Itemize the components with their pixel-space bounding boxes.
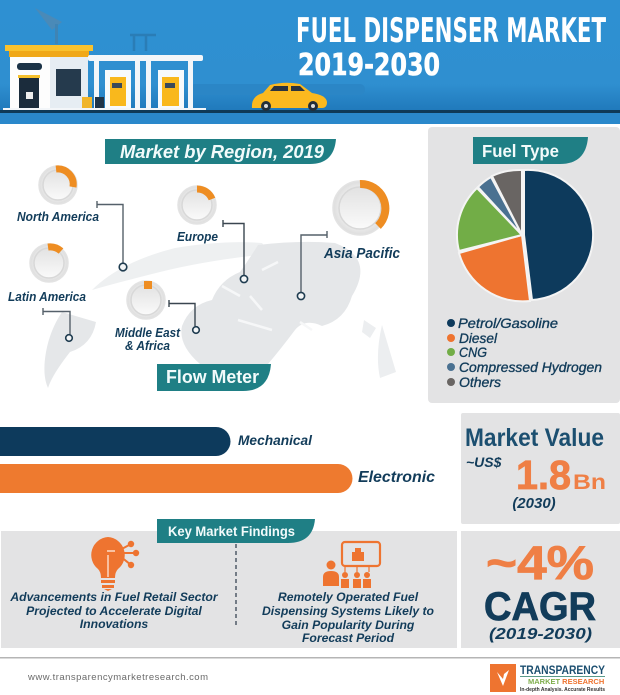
banner: key market findings: Key Market Findings	[168, 524, 295, 539]
panel: market value: Bn	[573, 471, 606, 494]
title: 2019-2030	[298, 48, 440, 83]
banner: key market findings	[157, 519, 315, 543]
panel: market value	[461, 413, 620, 524]
panel: market value: Market Value	[465, 424, 604, 452]
label: Asia Pacific: Asia Pacific	[323, 245, 401, 262]
text: finding 1: Advancements in Fuel Retail Sector	[9, 590, 219, 604]
text: finding 1: Innovations	[80, 617, 148, 631]
world map	[44, 242, 396, 388]
panel: CAGR: (2019-2030)	[489, 626, 592, 643]
icon: yellow car	[252, 83, 327, 111]
panel: CAGR: ~4%	[486, 536, 594, 589]
donut: Middle East & Africa	[127, 281, 165, 319]
label: Middle East & Africa: Middle East	[115, 325, 181, 340]
donut: Latin America	[30, 244, 68, 282]
legend: fuel types	[447, 315, 602, 390]
text: finding 2	[262, 590, 435, 645]
bar: electronic: Electronic	[358, 469, 435, 486]
footer rule	[0, 657, 620, 658]
label: Latin America: Latin America	[8, 289, 86, 304]
banner: flow meter: Flow Meter	[166, 367, 259, 387]
legend: fuel types: Others	[459, 374, 501, 390]
pie chart	[457, 170, 593, 301]
bar: electronic	[0, 464, 435, 493]
connector: Middle East & Africa	[169, 300, 199, 333]
connector: Europe	[223, 220, 248, 283]
logo: Transparency Market Research: In-depth Analysis. Accurate Results	[520, 687, 605, 693]
panel: key market findings	[1, 519, 457, 648]
text: finding 2: Dispensing Systems Likely to	[262, 604, 435, 618]
panel: market value: 1.8	[516, 452, 571, 498]
banner: fuel type	[473, 137, 588, 164]
text: finding 1: Projected to Accelerate Digital	[26, 604, 202, 618]
icon: light bulb	[91, 537, 139, 591]
banner: flow meter	[157, 364, 271, 391]
logo: Transparency Market Research: MARKET RESEARCH	[528, 677, 604, 686]
donut: North America	[39, 166, 77, 204]
panel: fuel type	[428, 127, 620, 403]
illustration: fuel station	[3, 45, 206, 110]
panel: CAGR: CAGR	[484, 585, 596, 629]
panel: CAGR	[461, 531, 620, 648]
icon: remote monitoring	[323, 542, 380, 588]
logo: Transparency Market Research	[490, 663, 605, 693]
donut: Asia Pacific	[333, 181, 387, 235]
label: Middle East & Africa	[115, 325, 181, 353]
header banner	[0, 0, 620, 124]
footer url: www.transparencymarketresearch.com	[27, 672, 208, 683]
connector: Asia Pacific	[297, 231, 327, 300]
title	[296, 11, 606, 83]
connector: North America	[97, 201, 127, 271]
legend: fuel types: Compressed Hydrogen	[459, 359, 602, 375]
banner: fuel type: Fuel Type	[482, 141, 559, 161]
text: finding 2: Gain Popularity During	[282, 618, 415, 632]
donut: Europe	[178, 186, 216, 224]
text: finding 2: Forecast Period	[302, 631, 395, 645]
bar: mechanical: Mechanical	[238, 432, 313, 448]
label: Middle East & Africa: & Africa	[125, 338, 170, 353]
banner: market by region: Market by Region, 2019	[120, 141, 325, 162]
divider	[235, 544, 237, 625]
panel: market value: ~US$	[466, 454, 502, 470]
text: finding 2: Remotely Operated Fuel	[278, 590, 419, 604]
legend: fuel types: Diesel	[459, 330, 498, 346]
label: Europe: Europe	[177, 229, 218, 244]
logo: Transparency Market Research: TRANSPARENCY	[520, 663, 605, 677]
panel: market value: (2030)	[512, 495, 556, 512]
legend: fuel types: Petrol/Gasoline	[458, 315, 558, 331]
label: North America: North America	[17, 209, 99, 224]
text: finding 1	[9, 590, 219, 631]
bar: mechanical	[0, 427, 313, 456]
connector: Latin America	[43, 308, 72, 341]
legend: fuel types: CNG	[459, 344, 487, 360]
